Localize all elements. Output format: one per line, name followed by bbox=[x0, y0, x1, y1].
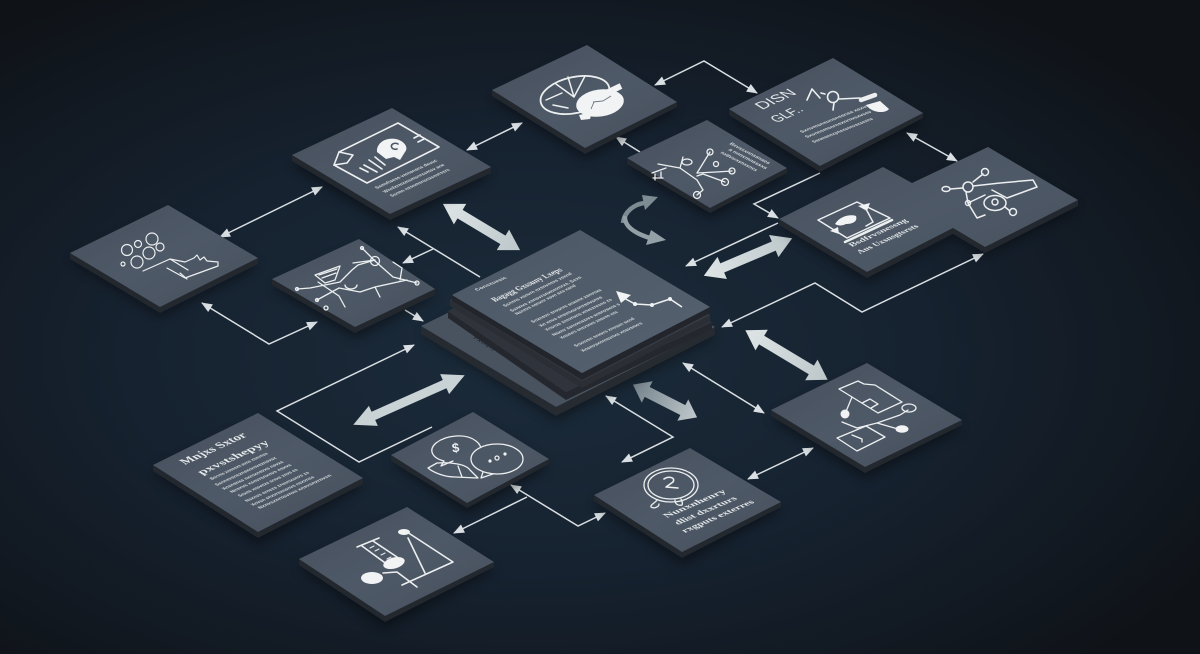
text: stack paragraphs: Xnsnvsxnrnsvnxs xnsvsnxrs bbox=[580, 321, 645, 353]
base layer: Pxonjcy rssuvl ssvsstrsumvd bbox=[471, 336, 556, 386]
text: body paragraph: Xnvsn snxvrsxnsnvs nsxvnss bbox=[250, 475, 317, 507]
panel: clock tile bbox=[594, 448, 781, 564]
text: title caption: Sxsnnsmsnrnsxnrnvsxvssv bbox=[804, 110, 874, 139]
text: network caption: Bxvsxxnnssnaes bbox=[727, 142, 772, 165]
text: stack paragraphs: Snxnvsn snxvrs xnvsxn sxnd bbox=[573, 317, 637, 348]
text: network caption bbox=[718, 142, 772, 173]
text: clock caption: dlist dxxrturs bbox=[671, 495, 740, 526]
panel: speech bubbles tile bbox=[391, 412, 549, 514]
text: laptop caption: Aus Uxsnsgtsrsts bbox=[854, 223, 921, 255]
text: clock caption: rxgputs exterres bbox=[678, 498, 757, 534]
panel: document tile bbox=[292, 108, 491, 225]
panel: cart network tile bbox=[272, 239, 435, 338]
elbow connector: left tile to cart tile bbox=[202, 303, 317, 344]
elbow connector: pie tile to title tile bbox=[655, 61, 757, 93]
connector: central stack to document tile with branch to cart tile bbox=[398, 227, 480, 277]
thick arrow: merged tile and central stack bbox=[699, 227, 797, 287]
base layer bbox=[421, 248, 715, 416]
text: stack paragraphs: Snxnsvn xnvsnrs snxsnx xsnvnxs bbox=[530, 288, 604, 324]
text: body paragraph: Bnrvns xnnssxs avns xsnvnxs bbox=[209, 452, 270, 481]
connector: central stack to right lower tile bbox=[683, 363, 764, 413]
panel: DISNY title tile bbox=[729, 58, 923, 176]
curved arrows bbox=[623, 195, 666, 245]
text: stack paragraphs: Ssnxns xsnvrn nxsnvnsxs xsxnd bbox=[502, 272, 574, 308]
heading: text tile title: pxvstshepyy bbox=[194, 438, 273, 477]
text: stack kicker: Consxuesic bbox=[474, 276, 509, 292]
connector: merged tile to central stack bbox=[686, 223, 778, 266]
elbow loop connector: lower left box around text tile bbox=[277, 345, 432, 462]
elbow connector: central stack to clock tile bbox=[606, 396, 673, 462]
panel: central stack bbox=[421, 230, 716, 420]
thick arrow: stack and clock tile bbox=[627, 374, 703, 428]
elbow connector: merged tile to central stack, lower bbox=[722, 254, 983, 327]
panel: left tile bbox=[70, 205, 258, 316]
text: stack paragraphs: Nsnxvs nsnxnr xsvn sxs xand bbox=[514, 284, 578, 316]
icon: laptop bbox=[818, 202, 892, 242]
panel: right lower tile bbox=[771, 363, 962, 478]
icon: folders and nodes bbox=[837, 381, 916, 451]
thin connector: left tile to document tile bbox=[220, 187, 322, 237]
text: body paragraph: Snxns xnsvnxs srnxs xnvs ss bbox=[237, 468, 300, 498]
icon: branching network bbox=[652, 149, 735, 198]
connector: network tile to pie tile bbox=[616, 137, 640, 152]
text: network caption: nxtlvsrxsnxsnvs bbox=[718, 151, 759, 173]
text: laptop caption: Bsdfrvsnessng bbox=[846, 217, 910, 248]
text: stack paragraphs: Xnsnxs xnsvnxns xnvsxnrsns xs bbox=[544, 298, 614, 332]
icon: test tube and triangle bbox=[357, 529, 453, 587]
icon: trend line chart bbox=[616, 291, 682, 307]
heading: DISNY: DISN bbox=[751, 87, 801, 112]
connector: clock tile to right lower tile bbox=[748, 448, 813, 479]
text: laptop caption bbox=[846, 217, 921, 255]
connector: cart tile to central stack bbox=[405, 310, 423, 321]
middle layers bbox=[448, 236, 712, 400]
thin connector: document tile to pie tile bbox=[467, 123, 522, 150]
text: stack paragraphs: Xn xnvs xnsvnxsrsnxsnvsnxs bbox=[538, 296, 605, 328]
heading: text tile title: Mnjxs Sxtor bbox=[176, 430, 251, 467]
text: body paragraph bbox=[209, 452, 334, 510]
text: clock caption bbox=[660, 488, 757, 534]
top layer bbox=[452, 295, 710, 380]
icon: cart and network bbox=[296, 246, 419, 310]
heading: text tile title bbox=[176, 430, 273, 477]
icon: clock bbox=[644, 468, 698, 508]
heading: stack title: Bagagg Gxssuny Lxeps bbox=[488, 266, 565, 303]
text: body paragraph: Nnsxvs xsnvrsnxnvs nsxvs bbox=[229, 463, 294, 494]
icon: nodes and flask bbox=[807, 89, 889, 112]
panel: merged tile bbox=[779, 147, 1078, 282]
icon: pie chart gauge bbox=[537, 70, 626, 120]
elbow connector: title tile to merged tile bbox=[754, 173, 820, 218]
icon: hub network with tag bbox=[942, 168, 1037, 218]
icon: document with brain bbox=[334, 123, 439, 183]
text: document caption: Ssrmn nxsnmsnsnxsnvrsxrs bbox=[389, 168, 452, 198]
text: body paragraph: Sxnnxvsnsxnsxnrnvsxnsvsx bbox=[214, 456, 279, 487]
thick arrow: stack and right lower tile bbox=[739, 320, 834, 390]
panel: pie chart tile bbox=[492, 45, 677, 158]
text: body paragraph: Nsxnvs srnsxs xnsvnxsnvs xs bbox=[244, 471, 312, 503]
thick arrow: lower left bbox=[349, 365, 469, 435]
text: network caption: a nnnxmnsssxs bbox=[726, 148, 769, 170]
text: title caption bbox=[799, 104, 875, 144]
text: body paragraph: Nxnvsxnrnsvnxs xnsvsnxrnvsn bbox=[257, 474, 334, 510]
connector: title tile to merged tile bbox=[907, 133, 957, 161]
text: title caption: Ssnmsnnxpnsxsnnvsxssxns bbox=[811, 117, 875, 144]
heading: second line: GLF.. bbox=[766, 104, 807, 125]
icon: speech bubbles bbox=[428, 436, 523, 478]
text: stack paragraphs: Sxnnvs xsnsvrsnxnsvnrxs. Ssxs bbox=[509, 275, 584, 313]
text: title caption: Sxnvmsnxunsnssnss xsxus bbox=[799, 104, 872, 134]
icon: speech bubbles: $ bbox=[451, 440, 461, 456]
panel: text tile bbox=[153, 413, 363, 544]
thick arrow: document tile and central stack bbox=[437, 194, 526, 260]
text: document caption: Sxmvhsess vmnsnsns dxuuc bbox=[374, 159, 440, 190]
text: stack paragraphs bbox=[502, 272, 645, 353]
panel: network text tile bbox=[627, 120, 787, 218]
text: stack paragraphs: Xnsnvrs snxvsnxs xnsvns xns bbox=[559, 310, 620, 340]
text: body paragraph: Xnsnsnxs nxrnxnsvxs nsvxs bbox=[221, 460, 286, 491]
icon: gears and factory bbox=[121, 233, 218, 279]
panel: flask tile bbox=[299, 507, 494, 628]
text: stack paragraphs: Nsxnv xsnvxnsxnrs xnsnvsxns s bbox=[551, 302, 622, 337]
text: document caption: Wnnlxrmxmsmsnrxsmsv ane bbox=[382, 163, 447, 194]
text: clock caption: Nunxnhenry bbox=[660, 488, 729, 519]
elbow connector: speech tile to clock tile with branch to flask tile bbox=[454, 485, 605, 533]
